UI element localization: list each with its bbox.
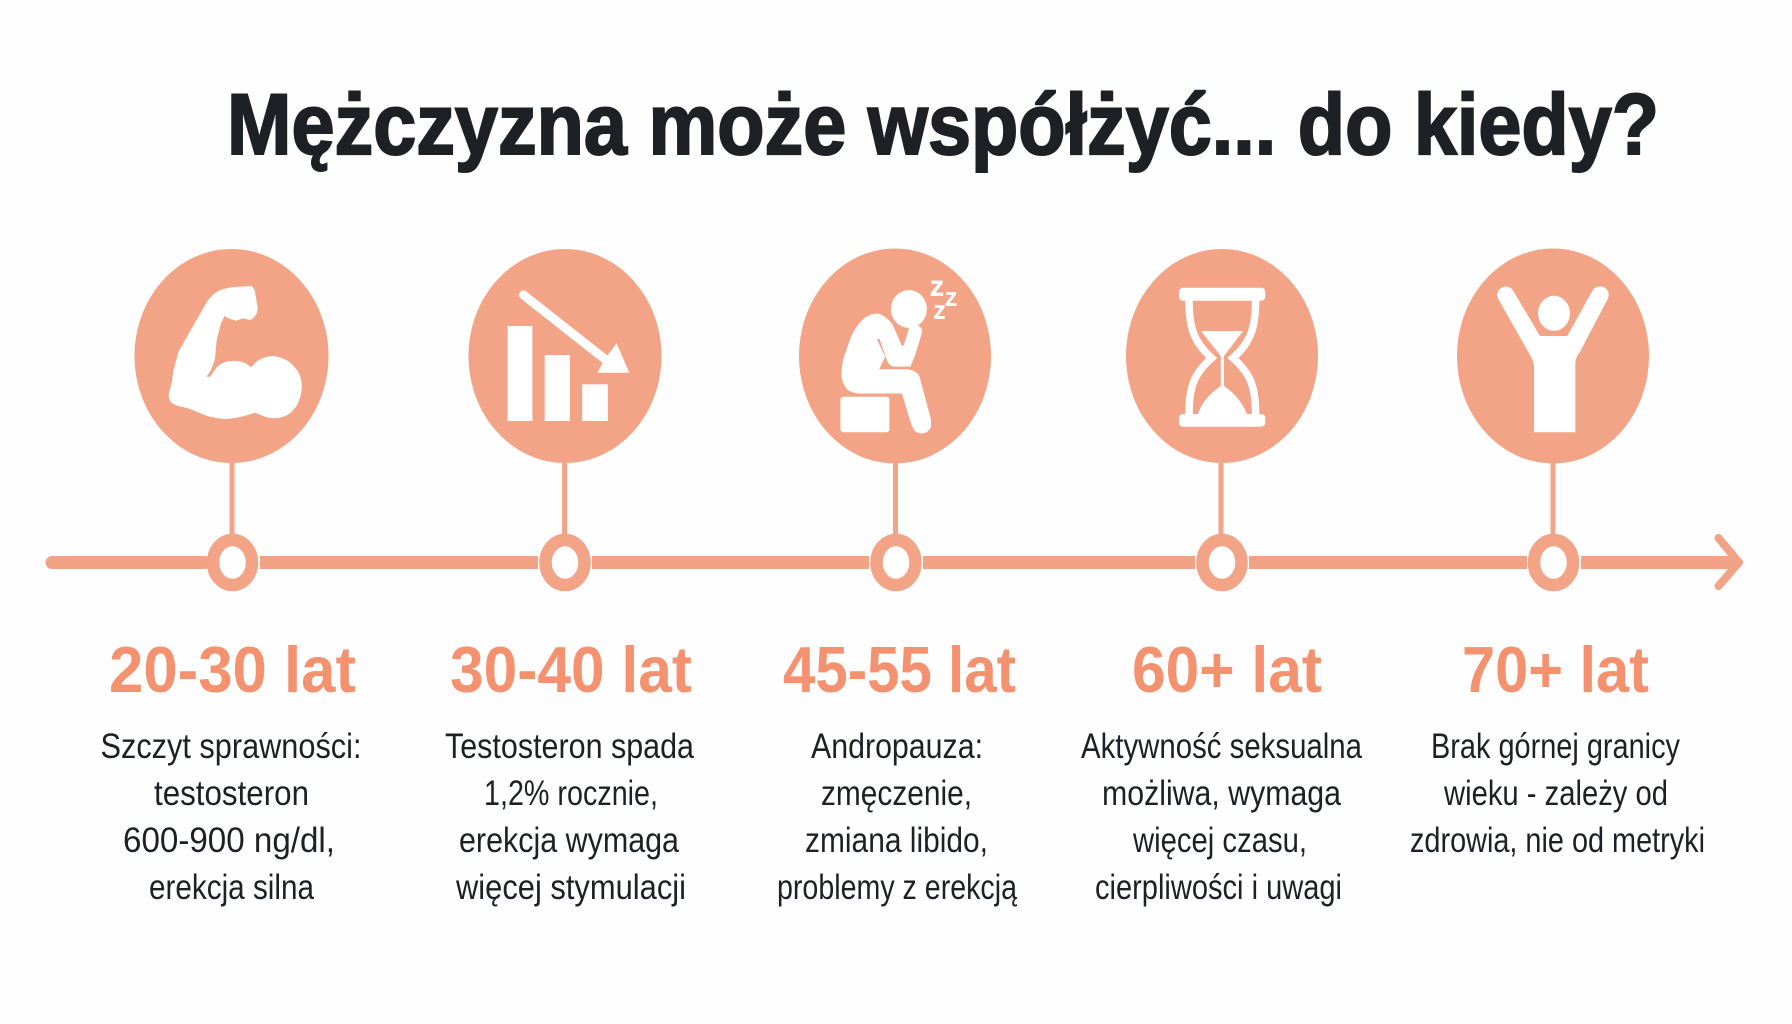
description: problemy z erekcją — [777, 868, 1017, 907]
description: więcej czasu, — [1132, 821, 1307, 860]
description: możliwa, wymaga — [1102, 774, 1341, 813]
description — [445, 727, 694, 907]
timeline marker — [1534, 540, 1573, 585]
connector stem — [562, 463, 567, 535]
panel: 45-55 lat — [777, 248, 1017, 907]
timeline axis with arrow — [52, 538, 1739, 586]
connector stem — [230, 463, 234, 535]
icon: flexed arm in circle — [134, 249, 328, 463]
description: zdrowia, nie od metryki — [1410, 821, 1705, 860]
icon: tired seated person — [799, 248, 991, 464]
description: erekcja wymaga — [459, 821, 679, 860]
age label: 20-30 lat — [109, 633, 356, 706]
age label: 70+ lat — [1462, 633, 1649, 706]
connector stem — [1550, 463, 1556, 535]
description: 1,2% rocznie, — [484, 774, 658, 813]
panel: 70+ lat — [1410, 248, 1705, 860]
description — [777, 727, 1017, 907]
icon: falling bar chart with arrow — [468, 249, 662, 463]
age label: 30-40 lat — [450, 633, 692, 706]
icon: hourglass — [1126, 249, 1318, 463]
description: 600-900 ng/dl, — [123, 821, 335, 860]
panel: 30-40 lat — [445, 249, 694, 907]
timeline marker — [546, 540, 584, 585]
title: Mężczyzna może współżyć... do kiedy? — [227, 77, 1659, 173]
icon: tired seated person: Z — [934, 302, 945, 322]
icon: tired seated person: Z — [946, 290, 956, 310]
icon: tired seated person: Z — [930, 278, 944, 300]
description: cierpliwości i uwagi — [1095, 868, 1342, 907]
description: Testosteron spada — [445, 727, 694, 766]
description: Andropauza: — [811, 727, 983, 766]
description: Aktywność seksualna — [1081, 727, 1362, 766]
connector stem — [1218, 463, 1224, 535]
description: zmęczenie, — [821, 774, 972, 813]
description — [1410, 727, 1705, 860]
age label: 60+ lat — [1132, 633, 1322, 706]
timeline marker — [213, 540, 252, 585]
description: Szczyt sprawności: — [100, 727, 362, 766]
connector stem — [893, 463, 898, 535]
description: erekcja silna — [149, 868, 314, 907]
description — [100, 727, 362, 907]
description — [1081, 727, 1362, 907]
description: Brak górnej granicy — [1431, 727, 1680, 766]
icon: person with raised arms — [1457, 248, 1649, 464]
description: testosteron — [154, 774, 309, 813]
timeline marker — [876, 540, 916, 585]
age label: 45-55 lat — [783, 633, 1016, 706]
timeline marker — [1202, 540, 1242, 585]
description: wieku - zależy od — [1443, 774, 1668, 813]
panel: 60+ lat — [1081, 249, 1362, 907]
description: więcej stymulacji — [455, 868, 686, 907]
description: zmiana libido, — [805, 821, 988, 860]
panel: 20-30 lat — [100, 249, 362, 907]
